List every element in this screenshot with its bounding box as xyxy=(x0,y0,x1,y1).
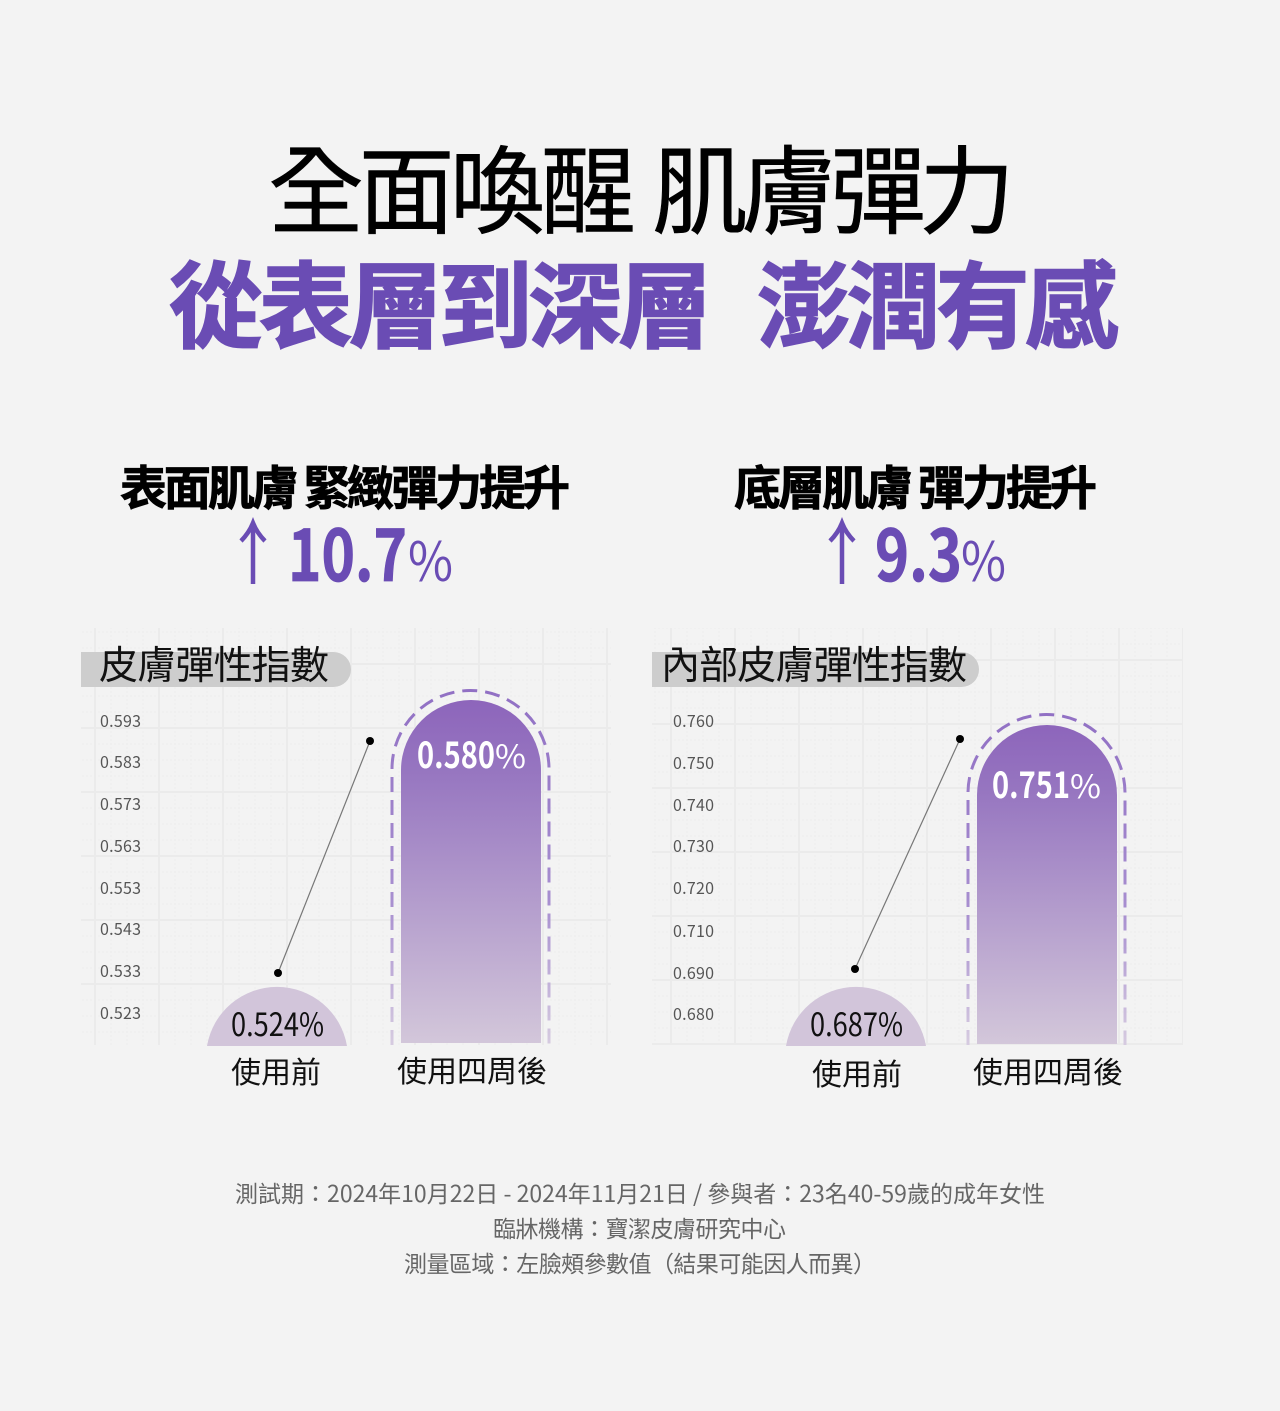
stat: 9.3%: 9.3 xyxy=(875,500,962,602)
stat: 10.7%: 10.7 xyxy=(288,500,407,602)
y axis labels: 0.583 xyxy=(100,749,141,773)
y axis labels: 0.690 xyxy=(673,960,714,984)
title line 1: 全面喚醒 xyxy=(268,115,636,254)
footnote xyxy=(235,1175,1045,1279)
percent sign: % xyxy=(408,518,453,597)
y axis labels: 0.680 xyxy=(673,1001,714,1025)
value: before: 0.687% xyxy=(810,1000,903,1046)
value: after: 0.751 xyxy=(992,757,1070,809)
y axis labels: 0.720 xyxy=(673,875,714,899)
title line 2 xyxy=(169,232,1119,368)
y axis labels xyxy=(100,708,141,1024)
value: after: % xyxy=(495,732,526,778)
y axis labels: 0.553 xyxy=(100,875,141,899)
chart title pill xyxy=(652,652,979,687)
y axis labels xyxy=(673,708,714,1025)
y axis labels: 0.740 xyxy=(673,792,714,816)
title line 2: 澎潤有感 xyxy=(757,232,1119,368)
panel: surface skin result xyxy=(120,450,570,602)
label: after four weeks: 使用四周後 xyxy=(973,1048,1123,1092)
icon: up arrow xyxy=(830,523,854,584)
chart title pill xyxy=(81,652,351,687)
heading: surface skin: 表面肌膚 緊緻彈力提升 xyxy=(120,450,570,519)
value: after: 0.580 xyxy=(417,727,495,779)
y axis labels: 0.563 xyxy=(100,833,141,857)
y axis labels: 0.730 xyxy=(673,833,714,857)
title line 1 xyxy=(268,115,1015,254)
label: before: 使用前 xyxy=(812,1050,902,1094)
value: after: % xyxy=(1070,762,1101,808)
label: before: 使用前 xyxy=(231,1048,321,1092)
connector line xyxy=(851,735,964,973)
panel: deep skin result xyxy=(734,450,1097,602)
after bar xyxy=(401,700,541,1043)
title xyxy=(169,115,1119,368)
y axis labels: 0.710 xyxy=(673,918,714,942)
after bar xyxy=(977,725,1117,1044)
after bar dashed outline xyxy=(968,714,1125,1045)
y axis labels: 0.543 xyxy=(100,916,141,940)
y axis labels: 0.533 xyxy=(100,958,141,982)
title line 1: 肌膚彈力 xyxy=(652,115,1015,254)
before bar xyxy=(207,987,347,1046)
connector line xyxy=(274,737,374,977)
footnote line 3: 測量區域：左臉頰參數值（結果可能因人而異） xyxy=(404,1245,876,1279)
grid xyxy=(81,628,611,1045)
footnote line 2: 臨牀機構：寶潔皮膚研究中心 xyxy=(493,1210,786,1244)
heading: deep skin: 底層肌膚 彈力提升 xyxy=(734,450,1097,519)
y axis labels: 0.760 xyxy=(673,708,714,732)
value: before: 0.524% xyxy=(231,1000,324,1046)
after bar dashed outline xyxy=(392,691,549,1045)
grid xyxy=(652,628,1183,1045)
footnote line 1: 測試期：2024年10月22日 - 2024年11月21日 / 參與者：23名40-59歲的成年女性 xyxy=(235,1175,1045,1209)
title line 2: 從表層到深層 xyxy=(169,232,712,368)
label: after four weeks: 使用四周後 xyxy=(397,1047,547,1091)
icon: up arrow xyxy=(241,523,265,584)
percent sign: % xyxy=(961,518,1006,597)
before bar xyxy=(786,987,926,1046)
y axis labels: 0.750 xyxy=(673,750,714,774)
y axis labels: 0.573 xyxy=(100,791,141,815)
chart title: 皮膚彈性指數 xyxy=(99,635,329,691)
chart: inner skin elasticity index xyxy=(652,628,1183,1094)
y axis labels: 0.523 xyxy=(100,1000,141,1024)
y axis labels: 0.593 xyxy=(100,708,141,732)
chart: skin elasticity index xyxy=(81,628,611,1092)
chart title: 內部皮膚彈性指數 xyxy=(661,635,967,691)
